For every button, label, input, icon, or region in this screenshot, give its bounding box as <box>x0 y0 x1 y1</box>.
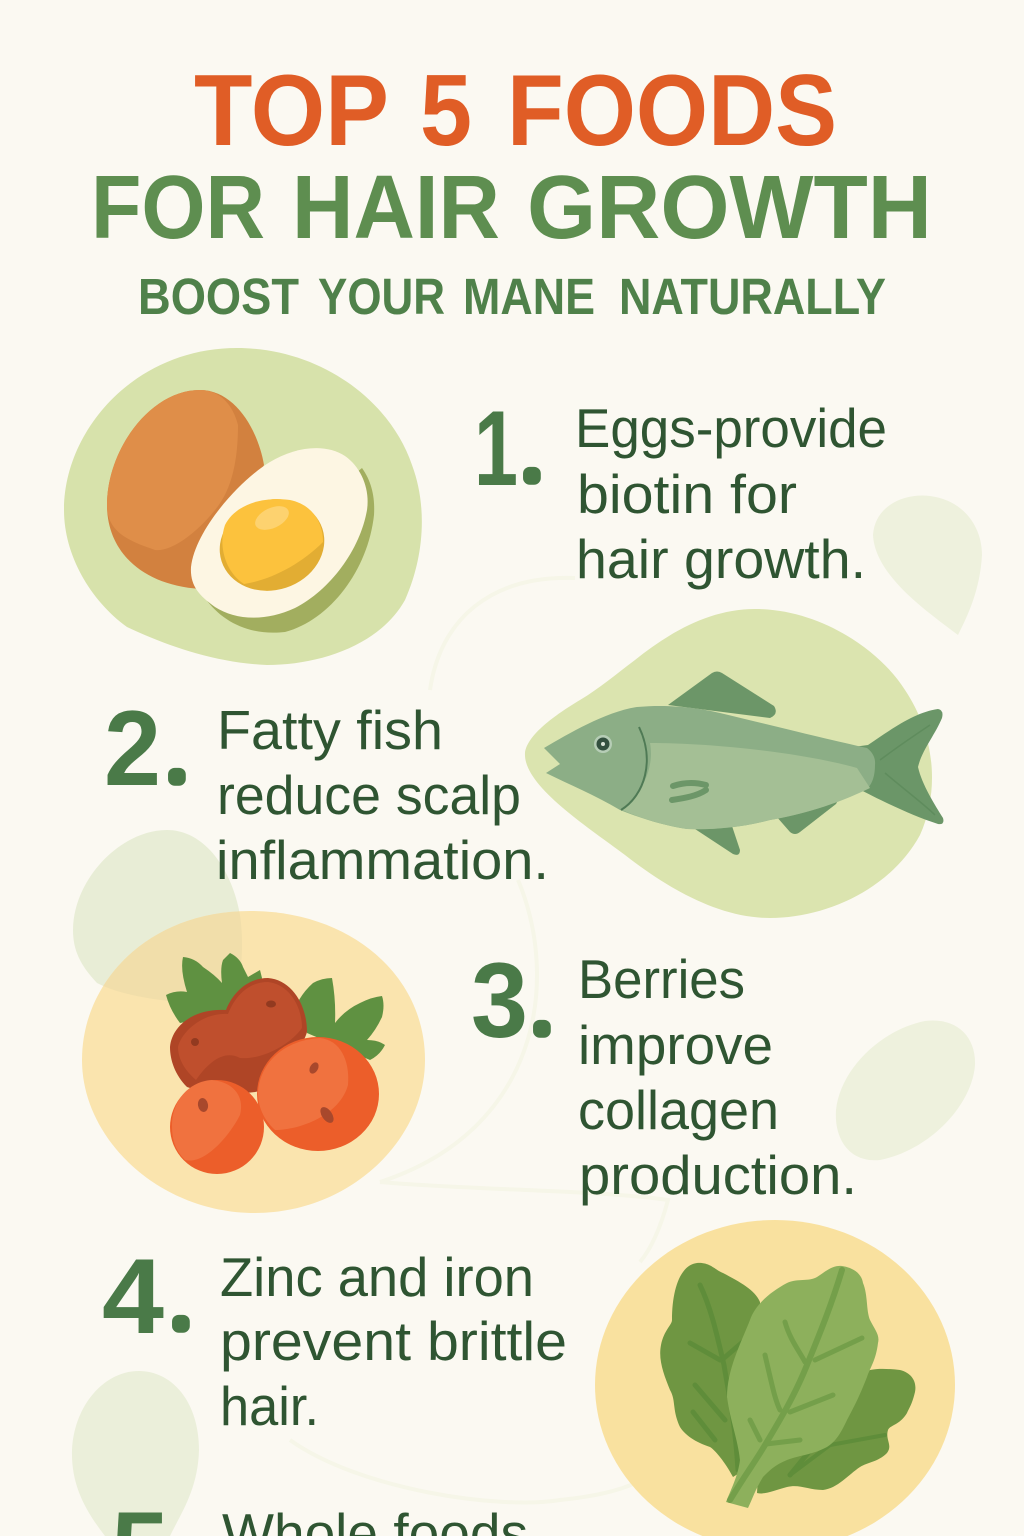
title: FOR <box>91 158 265 258</box>
title: 5 <box>420 55 472 167</box>
text: item 4: prevent brittle <box>220 1310 567 1372</box>
text: item 2: Fatty fish <box>217 699 443 761</box>
icon: fish <box>544 672 943 855</box>
fish background blob <box>525 609 932 918</box>
icon: spinach leaves <box>660 1263 915 1508</box>
title: YOUR <box>318 268 445 325</box>
text: item 1: Eggs-provide <box>575 397 887 459</box>
egg background blob <box>64 348 422 665</box>
text: item 4: . <box>177 1300 185 1333</box>
text: item 1: biotin for <box>577 463 797 525</box>
text: item 2: . <box>173 753 181 786</box>
panel: eggs <box>64 348 422 665</box>
text: item 3: . <box>538 1005 546 1038</box>
text: item 2: reduce scalp <box>217 764 521 826</box>
text: item 3: 3 <box>471 940 528 1060</box>
text: item 1: 1 <box>474 388 518 508</box>
title: BOOST <box>138 268 299 325</box>
text: item 2 <box>104 688 549 891</box>
icon: whole egg <box>107 390 264 589</box>
text: item 1: . <box>528 452 536 485</box>
title: NATURALLY <box>619 268 886 325</box>
decorative leaf: middle right <box>836 1020 975 1160</box>
berries background circle <box>82 911 425 1213</box>
text: item 2: inflammation. <box>216 829 549 891</box>
title: FOODS <box>507 55 837 167</box>
text: item 3: collagen <box>578 1079 779 1141</box>
icon: berries <box>166 953 385 1174</box>
decorative leaf: upper right <box>873 496 982 635</box>
text: item 3: production. <box>579 1144 857 1206</box>
title <box>91 55 932 325</box>
panel: spinach <box>595 1220 955 1536</box>
text: item 3 <box>471 940 857 1206</box>
text: item 4: 4 <box>102 1236 164 1356</box>
text: item 3: improve <box>578 1014 773 1076</box>
decorative leaf: behind berries <box>73 830 242 1003</box>
icon: halved egg <box>191 448 374 633</box>
panel: berries <box>82 911 425 1213</box>
overlap of pale leaf on circle <box>104 911 242 1000</box>
text: item 4 <box>102 1236 567 1437</box>
text: item 1 <box>474 388 887 590</box>
text: item 4: hair. <box>220 1375 319 1437</box>
title: GROWTH <box>527 158 932 258</box>
title: HAIR <box>292 158 500 258</box>
text: item 3: Berries <box>578 948 745 1010</box>
text: item 5 <box>111 1489 528 1536</box>
spinach background circle <box>595 1220 955 1536</box>
text: item 4: Zinc and iron <box>220 1246 534 1308</box>
panel: fish <box>525 609 943 918</box>
title: MANE <box>463 268 595 325</box>
text: item 1: hair growth. <box>576 528 866 590</box>
title: TOP <box>194 55 389 167</box>
decorative leaf: lower left <box>72 1371 199 1536</box>
text: item 2: 2 <box>104 688 161 808</box>
